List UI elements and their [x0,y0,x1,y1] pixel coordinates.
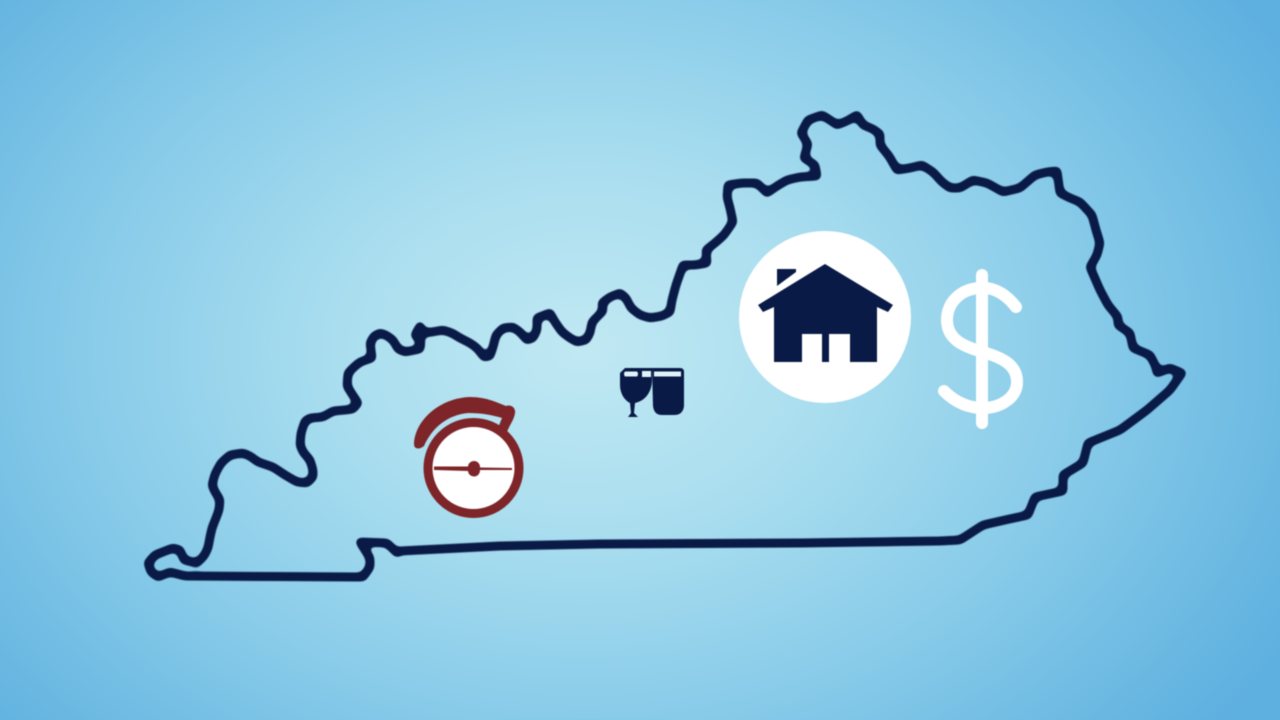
icon: dollar sign [944,275,1017,423]
icon: stopwatch [414,397,519,514]
white circle [739,231,911,403]
Kentucky state outline [148,115,1182,577]
stopwatch dial [428,422,519,514]
stopwatch needle [434,461,512,477]
stopwatch arc handle [414,397,515,448]
icon: glasses [620,368,684,417]
wine glass [620,368,652,417]
chimney [777,269,796,286]
glass rim highlights [624,371,681,377]
house [758,264,893,362]
icon: house in white circle [739,231,911,403]
tumbler [652,368,684,415]
